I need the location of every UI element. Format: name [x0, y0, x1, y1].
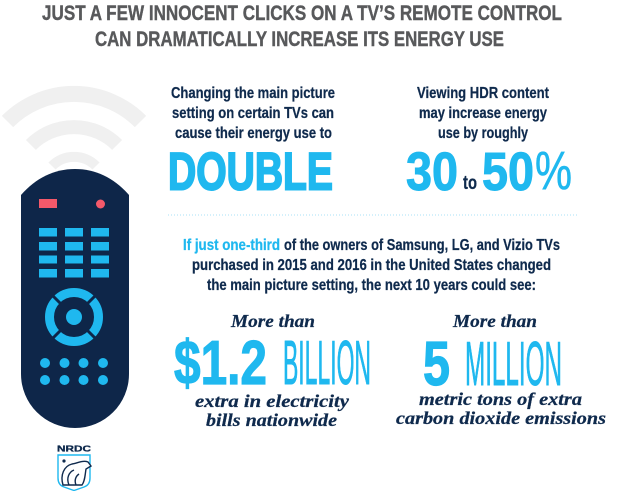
stat: 30 to 50 percent: [406, 141, 572, 202]
stat: 1.2 billion dollars: More than: [230, 311, 315, 331]
text block: one-third scenario: purchased in 2015 and 2016 in the United States changed: [192, 257, 551, 274]
NRDC logo: [57, 444, 91, 490]
stat: 5 million tons: carbon dioxide emissions: [396, 408, 606, 428]
text block: picture setting: setting on certain TVs can: [172, 105, 334, 122]
text block: HDR content: [417, 85, 550, 142]
stat: 1.2 billion dollars: extra in electricity: [195, 391, 350, 411]
icon: wifi signal arcs: [8, 94, 140, 166]
stat: 1.2 billion dollars: $1.2: [174, 329, 267, 398]
text block: one-third scenario: of the owners of Samsung, LG, and Vizio TVs: [284, 237, 560, 254]
text block: one-third scenario: If just one-third: [183, 237, 280, 254]
stat: 30 to 50 percent: to: [463, 173, 477, 194]
text block: HDR content: may increase energy: [419, 105, 547, 122]
title: CAN DRAMATICALLY INCREASE ITS ENERGY USE: [95, 28, 504, 51]
number button grid: [39, 228, 109, 278]
text block: picture setting: Changing the main picture: [171, 85, 335, 102]
text block: picture setting: [171, 85, 335, 142]
stat: 5 million tons: metric tons of extra: [419, 389, 582, 409]
stat: 30 to 50 percent: 30: [406, 142, 458, 202]
icon: remote control: [21, 169, 129, 428]
stat: 1.2 billion dollars: [174, 311, 371, 430]
NRDC logo: NRDC: [57, 444, 91, 454]
round buttons: [40, 358, 108, 385]
stat: 1.2 billion dollars: bills nationwide: [206, 410, 337, 430]
text block: picture setting: cause their energy use to: [175, 125, 332, 142]
stat: 30 to 50 percent: 50: [482, 142, 534, 202]
stat: 5 million tons: [396, 311, 606, 428]
text block: HDR content: use by roughly: [438, 125, 528, 142]
directional pad: [50, 292, 98, 342]
stat: double: DOUBLE: [168, 142, 333, 202]
title: [42, 2, 562, 51]
text block: HDR content: Viewing HDR content: [417, 85, 550, 102]
stat: 5 million tons: 5: [423, 330, 450, 399]
text block: one-third scenario: the main picture setting, the next 10 years could see:: [207, 277, 536, 294]
text: BILLION: [283, 329, 371, 398]
stat: 30 to 50 percent: %: [535, 141, 572, 201]
text block: one-third scenario: [183, 237, 560, 294]
remote body: [21, 169, 129, 428]
stat: 5 million tons: More than: [452, 311, 537, 331]
red power buttons: [39, 199, 105, 208]
